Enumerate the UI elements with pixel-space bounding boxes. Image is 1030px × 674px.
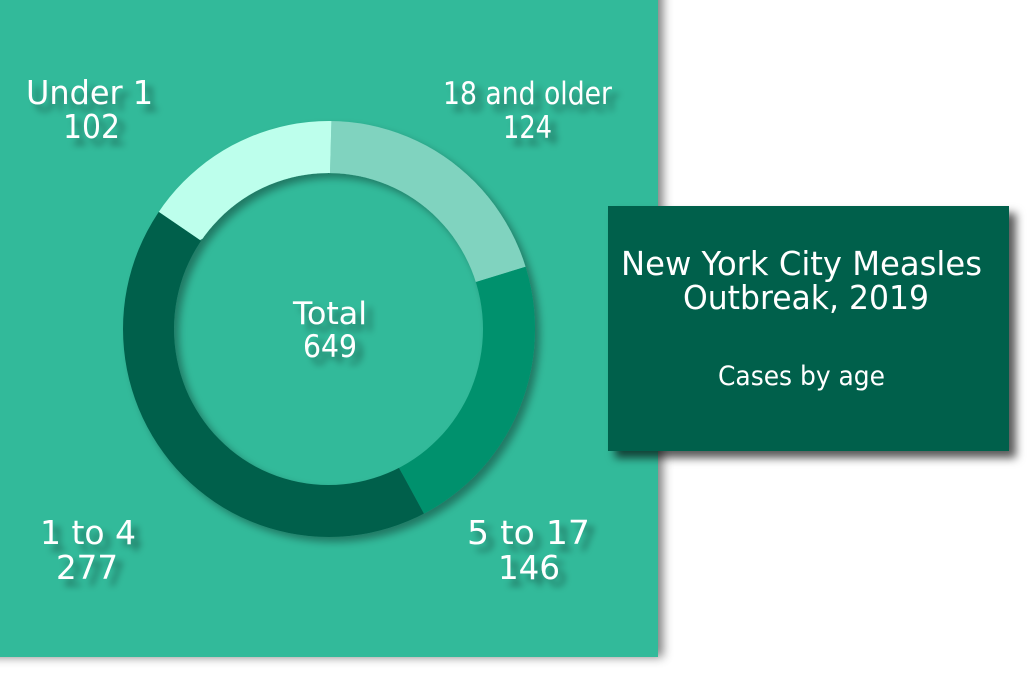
label: Total, 649 (292, 296, 367, 365)
label: Under 1, 102: Under 1 (26, 73, 153, 112)
label: 18 and older, 124: 18 and older (443, 76, 612, 112)
label: 1 to 4, 277: 1 to 4 (40, 513, 136, 552)
panel: title box (608, 206, 1009, 451)
title: New York City Measles (621, 244, 982, 283)
label: Under 1, 102: 102 (63, 107, 120, 146)
title (621, 244, 982, 317)
panel: green chart background (0, 0, 658, 657)
label: 1 to 4, 277 (40, 513, 136, 587)
label: 5 to 17, 146 (467, 513, 590, 587)
label: Total, 649: 649 (303, 329, 357, 365)
donut chart: cases by age (123, 121, 544, 546)
title: Outbreak, 2019 (683, 278, 929, 317)
subtitle: Cases by age (718, 361, 885, 392)
label: 5 to 17, 146: 146 (498, 548, 560, 587)
label: Under 1, 102 (26, 73, 153, 146)
segment: 1 to 4, 277 (123, 212, 431, 546)
label: Total, 649: Total (292, 296, 367, 332)
segment: 18 and older, 124 (330, 121, 533, 286)
segment: Under 1, 102 (158, 121, 339, 248)
segment: 5 to 17, 146 (399, 266, 544, 521)
label: 1 to 4, 277: 277 (56, 548, 118, 587)
label: 18 and older, 124 (443, 76, 612, 146)
label: 5 to 17, 146: 5 to 17 (467, 513, 590, 552)
label: 18 and older, 124: 124 (503, 110, 552, 146)
